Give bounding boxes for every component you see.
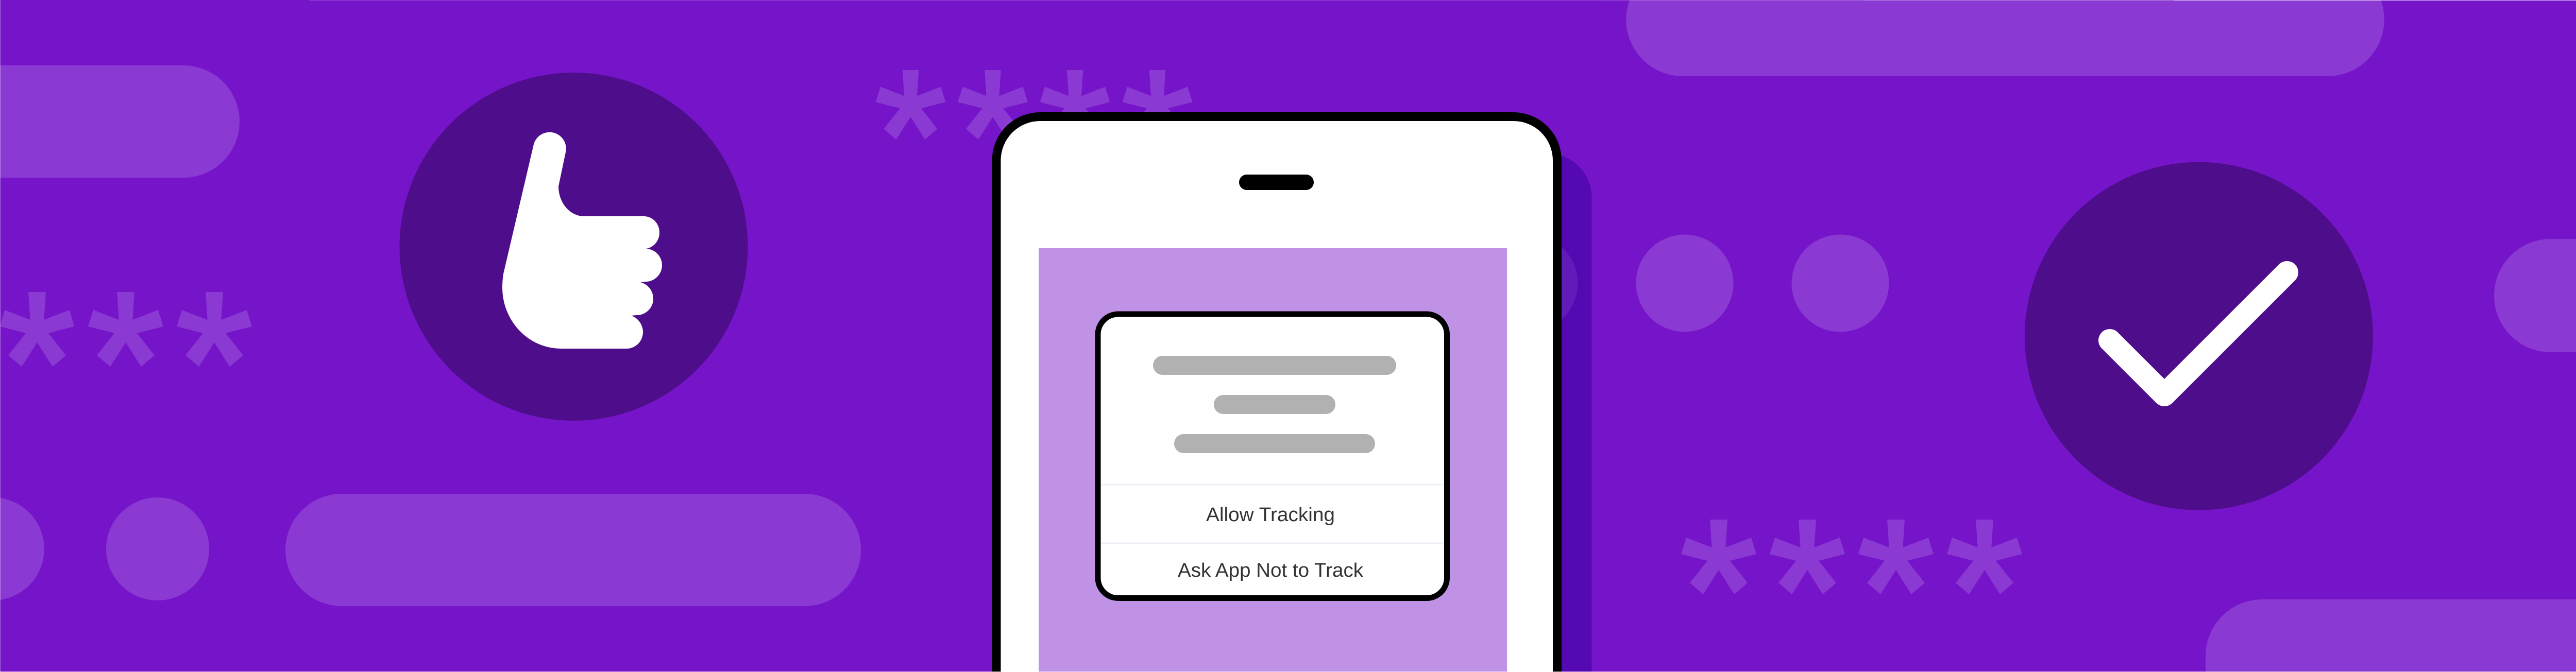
dots: bottom left (0, 497, 209, 600)
asterisks: lower right (1681, 520, 2022, 594)
pill: top left (0, 65, 240, 178)
asterisks: left (0, 292, 252, 367)
dot seen through phone shadow (1481, 235, 1578, 332)
phone shadow (1481, 153, 1592, 672)
icon: check mark (2110, 272, 2287, 395)
pill: bottom left (285, 494, 861, 606)
icon: thumbs up hand (502, 132, 662, 349)
pill: bottom right (2206, 599, 2576, 672)
tracking permission dialog (1098, 314, 1447, 598)
button: allow tracking: Allow Tracking (1206, 504, 1335, 526)
icon: thumbs up badge (400, 73, 748, 421)
phone speaker notch (1239, 175, 1314, 190)
phone body (996, 116, 1557, 672)
dots: right of phone (1636, 235, 1889, 332)
pill: top centre right (1626, 0, 2384, 76)
dialog box (1098, 314, 1447, 598)
placeholder text lines (1153, 356, 1396, 453)
icon: check mark badge (2025, 162, 2373, 510)
phone screen (1039, 248, 1507, 672)
asterisks: top centre (876, 70, 1192, 140)
phone (996, 116, 1557, 672)
pill: far right (2494, 239, 2576, 352)
button: ask app not to track: Ask App Not to Track (1178, 560, 1364, 581)
